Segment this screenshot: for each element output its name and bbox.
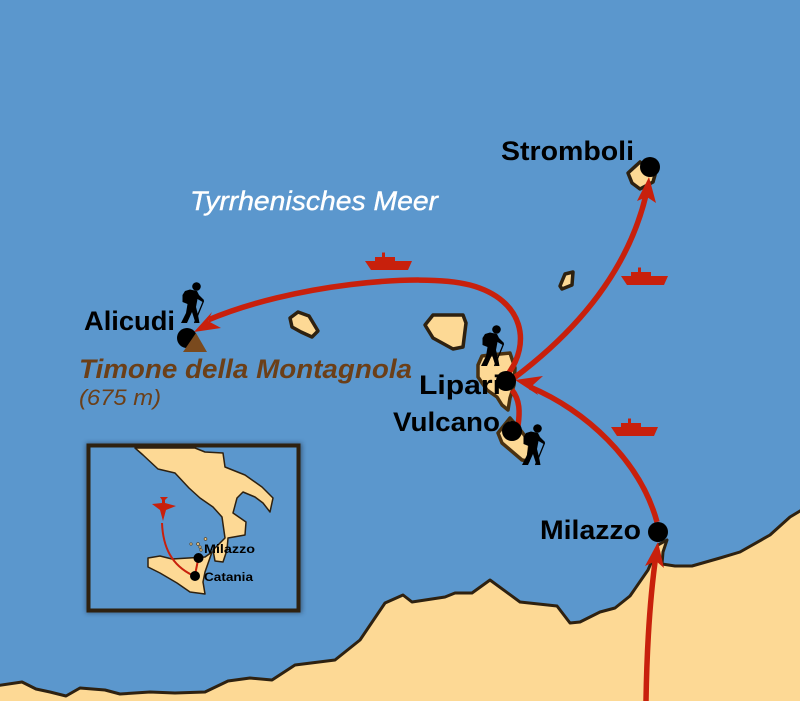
island: Stromboli bbox=[628, 162, 655, 189]
inset label: Milazzo: Milazzo bbox=[204, 542, 255, 556]
icon: hiker Vulcano bbox=[522, 424, 545, 465]
icon: hiker Alicudi bbox=[181, 282, 204, 323]
icon: ship east bbox=[621, 268, 668, 285]
label: Timone della Montagnola: Timone della Montagnola bbox=[79, 354, 412, 384]
island: Salina bbox=[425, 315, 466, 349]
label: altitude: (675 m) bbox=[79, 385, 161, 410]
location dots bbox=[177, 157, 668, 542]
label: Alicudi: Alicudi bbox=[84, 306, 175, 336]
arrow: land to Milazzo bbox=[646, 555, 656, 701]
icon: Alicudi volcano bbox=[183, 333, 207, 352]
icon: ship south bbox=[611, 418, 658, 436]
inset dots bbox=[194, 553, 204, 563]
arrowhead: Milazzo bbox=[645, 542, 664, 568]
label: Stromboli: Stromboli bbox=[501, 136, 634, 166]
arrow: Milazzo to Lipari bbox=[530, 387, 657, 522]
inset label: Catania: Catania bbox=[204, 570, 253, 584]
arrowhead: Lipari bbox=[515, 376, 543, 395]
arrowheads bbox=[194, 177, 664, 568]
arrowhead: Alicudi bbox=[194, 312, 221, 332]
arrow: Lipari to Vulcano bbox=[512, 390, 519, 426]
island: Vulcano bbox=[498, 418, 530, 461]
arrow: Lipari to Alicudi bbox=[208, 280, 520, 374]
island: Lipari bbox=[478, 353, 515, 410]
arrow: Lipari to Stromboli bbox=[514, 195, 646, 378]
arrowhead: Stromboli bbox=[637, 177, 656, 203]
inset sea bbox=[88, 446, 298, 610]
inset small islands bbox=[190, 538, 207, 551]
label: Lipari: Lipari bbox=[419, 370, 501, 400]
island: Filicudi bbox=[290, 312, 318, 337]
inset shadow bbox=[86, 443, 302, 613]
icon: hiker Lipari bbox=[481, 325, 504, 366]
label: sea name: Tyrrhenisches Meer bbox=[190, 186, 439, 216]
island: Panarea bbox=[560, 272, 573, 289]
icon: ship north bbox=[365, 252, 412, 270]
label: Vulcano: Vulcano bbox=[393, 407, 500, 437]
inset flight route bbox=[162, 523, 198, 575]
inset plane icon bbox=[152, 497, 176, 521]
inset Italy mainland bbox=[135, 448, 273, 562]
mainland Sicily coast bbox=[0, 508, 800, 701]
inset Sicily bbox=[148, 552, 212, 594]
route arrows bbox=[208, 195, 657, 701]
label: Milazzo: Milazzo bbox=[540, 515, 641, 545]
inset map bbox=[86, 443, 302, 613]
